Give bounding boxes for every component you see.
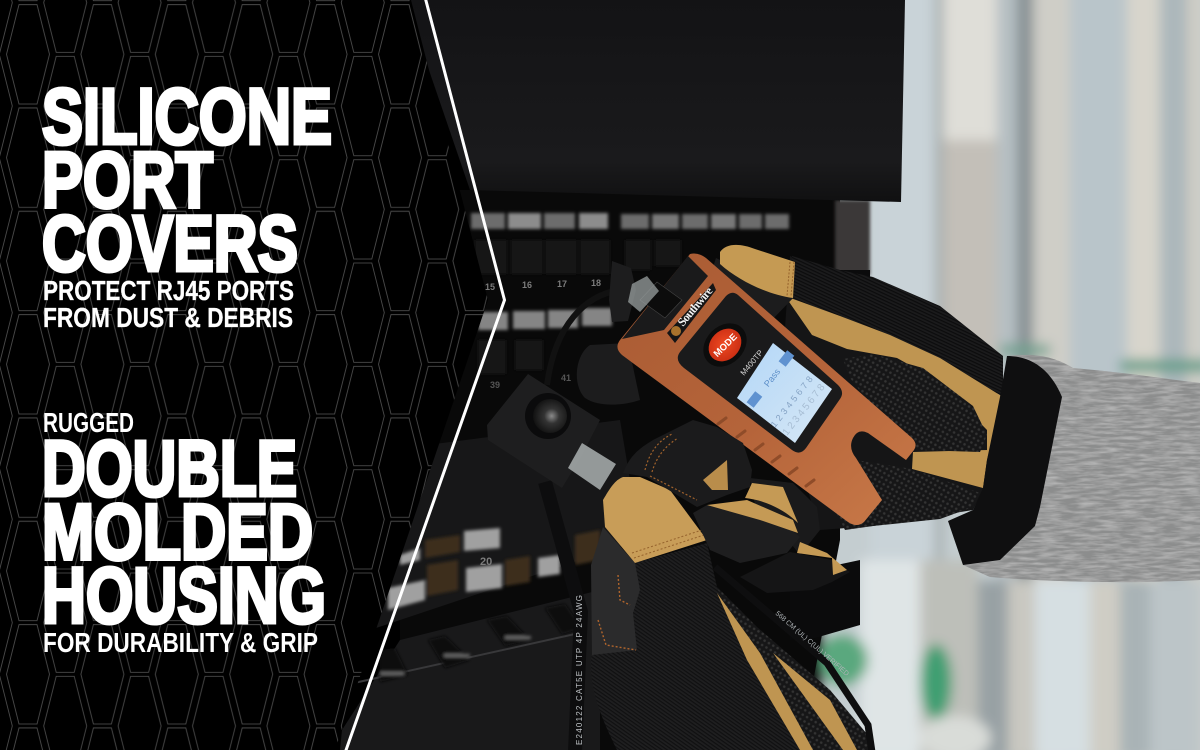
tester remote unit with port cover bbox=[487, 374, 616, 490]
hand base behind device bbox=[780, 256, 1003, 530]
finger two black bbox=[693, 505, 800, 563]
panel port numbers: 18 bbox=[591, 278, 601, 288]
panel port numbers: 41 bbox=[561, 373, 571, 383]
sleeve: grey knit arm bbox=[963, 355, 1200, 582]
model label: M400TP bbox=[739, 348, 765, 377]
white chevron divider line bbox=[345, 0, 504, 750]
finger three tan bbox=[797, 542, 847, 575]
glove palm pad bbox=[830, 459, 980, 530]
glove knit body bbox=[591, 543, 800, 750]
finger three black bbox=[740, 552, 850, 593]
heading: silicone port covers: COVERS bbox=[42, 200, 298, 288]
upper RJ45 plug with silicone cap bbox=[609, 261, 659, 322]
remote black block bbox=[487, 374, 600, 488]
text block: silicone port covers bbox=[42, 72, 332, 333]
glove tan stripe bbox=[785, 296, 1003, 488]
glove grain side bbox=[591, 527, 640, 655]
glove dotted pad bbox=[843, 354, 987, 452]
equipment rack backdrop bbox=[340, 190, 870, 750]
LCD screen bbox=[737, 343, 832, 443]
LCD screen: 12345678 bbox=[769, 374, 815, 429]
heading: double molded housing: HOUSING bbox=[42, 552, 326, 640]
panel port numbers: 17 bbox=[557, 279, 567, 289]
patch panel labels and ports bbox=[380, 213, 789, 682]
LCD screen: 12345678 bbox=[781, 382, 828, 438]
glove tan fingertip bbox=[720, 245, 795, 298]
device black top cap bbox=[622, 256, 708, 339]
subheading: protect ports: PROTECT RJ45 PORTS bbox=[43, 275, 294, 306]
knuckle finger bbox=[623, 420, 752, 507]
MODE button bbox=[695, 315, 755, 375]
subheading: protect ports: FROM DUST & DEBRIS bbox=[43, 302, 293, 333]
tester device bbox=[617, 254, 916, 525]
thumb behind device bbox=[577, 343, 640, 405]
device grip ribs bbox=[718, 418, 814, 486]
panel port numbers: 15 bbox=[485, 282, 495, 292]
device brand badge bbox=[667, 283, 716, 343]
finger two tan bbox=[707, 500, 798, 533]
heading: double molded housing bbox=[42, 424, 326, 640]
remote RJ45 plug bbox=[568, 443, 616, 490]
remote dial bbox=[525, 393, 571, 439]
cable: tester lead with printed marking: E240122 CAT5E UTP 4P 24AWG bbox=[575, 595, 584, 745]
glove black cuff bbox=[948, 356, 1062, 565]
panel port numbers: 20 bbox=[480, 556, 492, 568]
lead cable across glove with marking: 568 CM (UL) C(UL) VERIFIED bbox=[774, 610, 850, 678]
subheading: durability: FOR DURABILITY & GRIP bbox=[43, 627, 318, 658]
heading: double molded housing: MOLDED bbox=[42, 488, 313, 576]
photo background: blurred wall and conduits bbox=[816, 0, 1200, 750]
heading: silicone port covers: PORT bbox=[42, 136, 213, 224]
port slot bbox=[640, 282, 682, 318]
eyebrow: rugged: RUGGED bbox=[43, 407, 134, 438]
heading: silicone port covers bbox=[42, 72, 332, 288]
top black shelf bbox=[405, 0, 905, 202]
glove: lower hand bbox=[591, 420, 872, 750]
LCD screen: Pass bbox=[762, 366, 782, 389]
panel port numbers: 16 bbox=[522, 280, 532, 290]
black box behind hand bbox=[790, 560, 860, 640]
heading: silicone port covers: SILICONE bbox=[42, 72, 332, 160]
glove fingertip dark under bbox=[712, 258, 795, 322]
device brand badge: Southwire bbox=[675, 283, 716, 329]
glove tan thumb patch bbox=[603, 477, 707, 563]
lead cable across glove with marking bbox=[715, 567, 872, 750]
glove: upper hand bbox=[712, 245, 1062, 565]
panel port numbers bbox=[480, 278, 601, 568]
device orange housing bbox=[617, 254, 916, 525]
subheading: protect ports bbox=[43, 275, 294, 333]
left black panel with hexagon pattern bbox=[0, 0, 500, 750]
tan inside knuckle bbox=[703, 460, 728, 490]
cable: tester lead with printed marking bbox=[545, 290, 620, 750]
panel port numbers: 39 bbox=[490, 380, 500, 390]
heading: double molded housing: DOUBLE bbox=[42, 424, 297, 512]
finger upper tan bbox=[745, 483, 798, 523]
device black front panel bbox=[678, 293, 842, 453]
finger back knuckle bbox=[750, 478, 820, 555]
glove stitched band bbox=[717, 587, 872, 750]
text block: double molded housing bbox=[42, 407, 326, 658]
MODE button: MODE bbox=[712, 332, 740, 360]
glove knit back bbox=[790, 256, 1003, 397]
glove tan stripe bbox=[717, 593, 813, 750]
